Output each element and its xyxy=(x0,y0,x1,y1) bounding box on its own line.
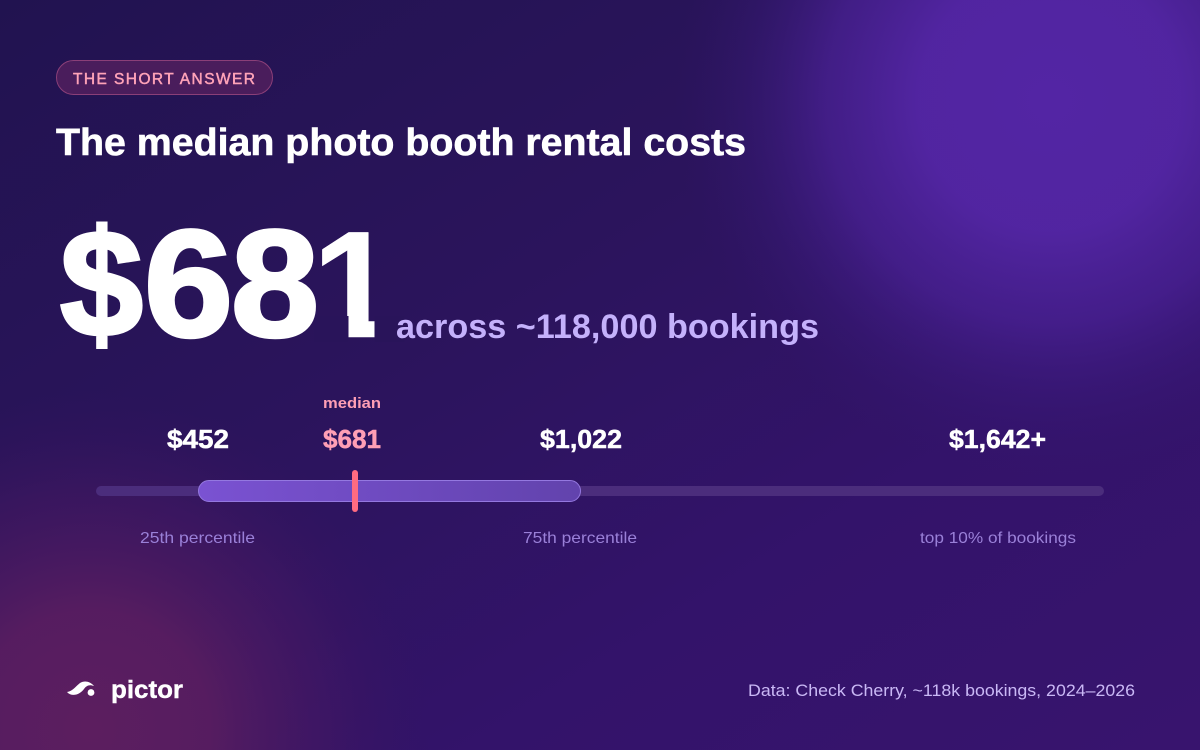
median label: median xyxy=(323,395,381,412)
value: 75th percentile: $1,022 xyxy=(540,424,622,454)
value: median: $681 xyxy=(323,424,381,454)
label: top 10 percent: top 10% of bookings xyxy=(920,530,1076,547)
value: 25th percentile: $452 xyxy=(167,424,229,454)
label: 75th percentile: 75th percentile xyxy=(523,530,637,547)
label: 25th percentile: 25th percentile xyxy=(140,530,255,547)
wordmark: pictor xyxy=(111,676,183,704)
title: The median photo booth rental costs xyxy=(56,122,746,164)
headline number xyxy=(60,199,404,370)
logo: pictor xyxy=(67,676,183,704)
badge: the short answer: THE SHORT ANSWER xyxy=(73,71,255,88)
headline subtext: across ~118,000 bookings xyxy=(396,308,819,346)
track xyxy=(96,486,1104,496)
digit 1: 1 xyxy=(312,200,397,370)
digit 8: 8 xyxy=(231,199,319,369)
data source: Data: Check Cherry, ~118k bookings, 2024–2026 xyxy=(748,681,1135,700)
price range chart xyxy=(96,395,1104,547)
value: top 10 percent: $1,642+ xyxy=(949,424,1046,454)
dollar sign: $ xyxy=(60,199,143,369)
digit 6: 6 xyxy=(144,199,233,369)
badge: the short answer xyxy=(56,60,272,94)
interquartile range bar xyxy=(198,480,580,502)
median marker xyxy=(352,470,358,512)
icon: pictor mark xyxy=(67,682,94,696)
